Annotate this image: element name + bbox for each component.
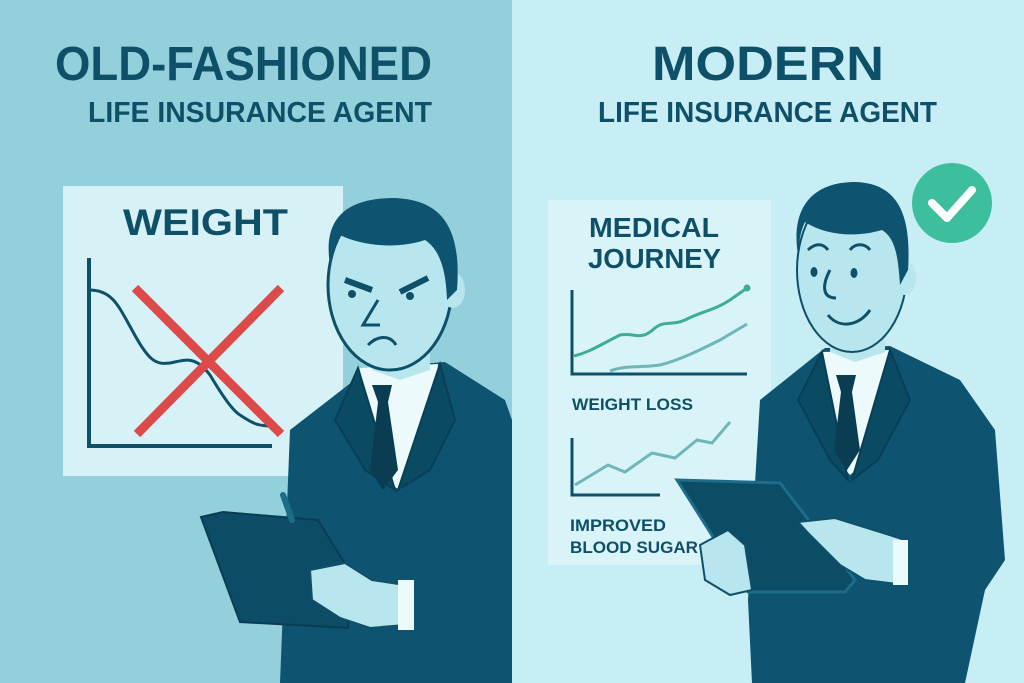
title: modern: MODERN — [652, 38, 884, 91]
poster: weight chart: WEIGHT — [123, 202, 288, 243]
title: old-fashioned: OLD-FASHIONED — [55, 38, 432, 91]
poster: weight chart — [63, 186, 343, 476]
title: modern: LIFE INSURANCE AGENT — [598, 97, 937, 129]
chart: blood sugar — [572, 422, 730, 495]
shirt — [822, 350, 890, 475]
figure: old-fashioned agent — [201, 198, 512, 683]
suit — [280, 362, 512, 683]
panel: modern background — [512, 0, 1024, 683]
face — [345, 278, 428, 292]
poster: medical journey: IMPROVED — [570, 516, 666, 535]
tie — [370, 385, 398, 490]
lapels — [798, 350, 910, 480]
poster: medical journey: BLOOD SUGAR — [570, 538, 698, 557]
title: old-fashioned: LIFE INSURANCE AGENT — [88, 97, 432, 129]
suit — [748, 346, 1005, 683]
head — [797, 188, 907, 352]
face — [808, 245, 870, 250]
clipboard — [201, 512, 350, 628]
hands — [700, 530, 752, 595]
panel: old-fashioned background — [0, 0, 512, 683]
poster: medical journey: JOURNEY — [588, 243, 721, 274]
head — [328, 200, 452, 370]
neck — [372, 350, 430, 380]
shirt — [360, 364, 438, 490]
icon: green check — [912, 163, 992, 243]
hand — [310, 563, 405, 628]
icon: red cross — [135, 288, 281, 434]
hair — [797, 182, 909, 285]
poster: medical journey: WEIGHT LOSS — [572, 395, 693, 414]
neck — [830, 332, 885, 362]
poster: medical journey: MEDICAL — [589, 212, 719, 243]
title: old-fashioned — [55, 38, 432, 129]
figure: modern agent — [677, 182, 1005, 683]
tie — [834, 375, 860, 470]
tablet — [677, 480, 855, 592]
chart: weight loss — [572, 284, 750, 374]
hair — [329, 198, 458, 300]
title: modern — [598, 38, 937, 129]
poster: medical journey — [548, 200, 771, 565]
lapels — [335, 364, 455, 490]
